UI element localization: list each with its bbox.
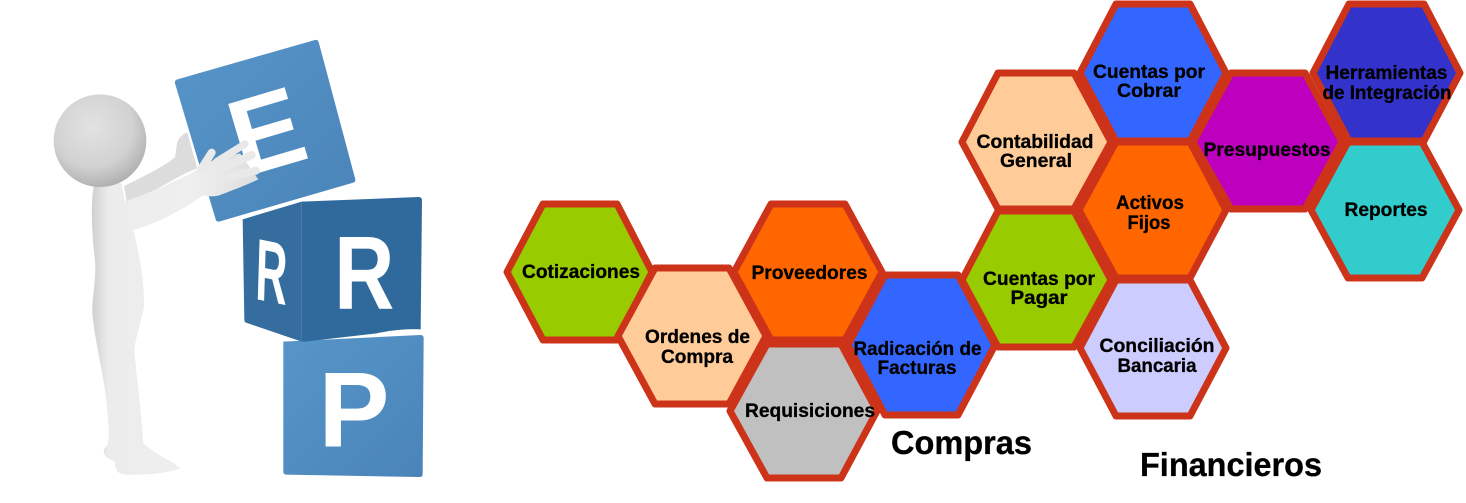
hexagon: Herramientas de Integración: de Integración xyxy=(1322,83,1452,104)
hexagon: Cuentas por Pagar: Pagar xyxy=(1010,288,1068,309)
block: R: R xyxy=(334,214,394,330)
illustration: figure stacking ERP blocks xyxy=(54,40,424,477)
body and front arm xyxy=(92,153,258,475)
hexagon: Conciliación Bancaria: Conciliación xyxy=(1100,336,1214,357)
hexagon: Proveedores: Proveedores xyxy=(752,263,868,284)
hexagon: Activos Fijos: Activos xyxy=(1116,193,1184,214)
hexagon: Cuentas por Pagar xyxy=(962,211,1111,347)
hexagon: Ordenes de Compra: Ordenes de xyxy=(645,327,750,348)
heading: Compras: Compras xyxy=(891,424,1032,461)
hexagon: Activos Fijos xyxy=(1079,142,1226,278)
hexagon: Cotizaciones: Cotizaciones xyxy=(522,262,640,283)
block: E: E xyxy=(215,64,319,201)
hexagon: Cuentas por Cobrar: Cobrar xyxy=(1117,81,1182,102)
hexagon: Requisiciones xyxy=(730,344,877,478)
hexagon: Contabilidad General: Contabilidad xyxy=(976,132,1094,153)
hexagon: Activos Fijos: Fijos xyxy=(1128,213,1170,234)
fingers xyxy=(202,144,256,178)
hexagon: Radicación de Facturas xyxy=(848,275,995,415)
hexagon: Presupuestos: Presupuestos xyxy=(1204,140,1330,161)
block: E xyxy=(175,40,355,222)
heading: Financieros: Financieros xyxy=(1140,446,1322,483)
hexagon: Herramientas de Integración xyxy=(1313,4,1460,141)
block: R: R xyxy=(254,219,289,324)
hexagon: Cuentas por Cobrar: Cuentas por xyxy=(1093,62,1206,83)
block: P xyxy=(283,335,424,477)
hexagon: Conciliación Bancaria xyxy=(1080,280,1226,416)
hexagon: Radicación de Facturas: Facturas xyxy=(878,358,956,379)
hexagon: Cuentas por Cobrar xyxy=(1080,4,1226,141)
hexagon: Presupuestos xyxy=(1193,73,1342,209)
hexagon: Cotizaciones xyxy=(507,204,652,340)
hexagon: Conciliación Bancaria: Bancaria xyxy=(1118,356,1197,377)
hexagon: Reportes xyxy=(1311,142,1459,278)
head xyxy=(54,94,146,187)
block: R xyxy=(243,197,422,342)
hexagon: Reportes: Reportes xyxy=(1344,200,1428,221)
back arm xyxy=(124,133,197,202)
hexagon: Radicación de Facturas: Radicación de xyxy=(854,339,982,360)
hexagon: Herramientas de Integración: Herramientas xyxy=(1326,63,1448,84)
hexagon: Ordenes de Compra xyxy=(618,268,766,404)
hexagon: Proveedores xyxy=(734,204,882,340)
figure: person xyxy=(54,94,258,475)
hexagon: Contabilidad General: General xyxy=(1000,151,1072,172)
block: P: P xyxy=(319,351,389,470)
hexagon: Cuentas por Pagar: Cuentas por xyxy=(983,269,1096,290)
hexagon: Ordenes de Compra: Compra xyxy=(661,347,733,368)
hexagon: Requisiciones: Requisiciones xyxy=(745,401,875,422)
hexagon: Contabilidad General xyxy=(962,73,1111,209)
